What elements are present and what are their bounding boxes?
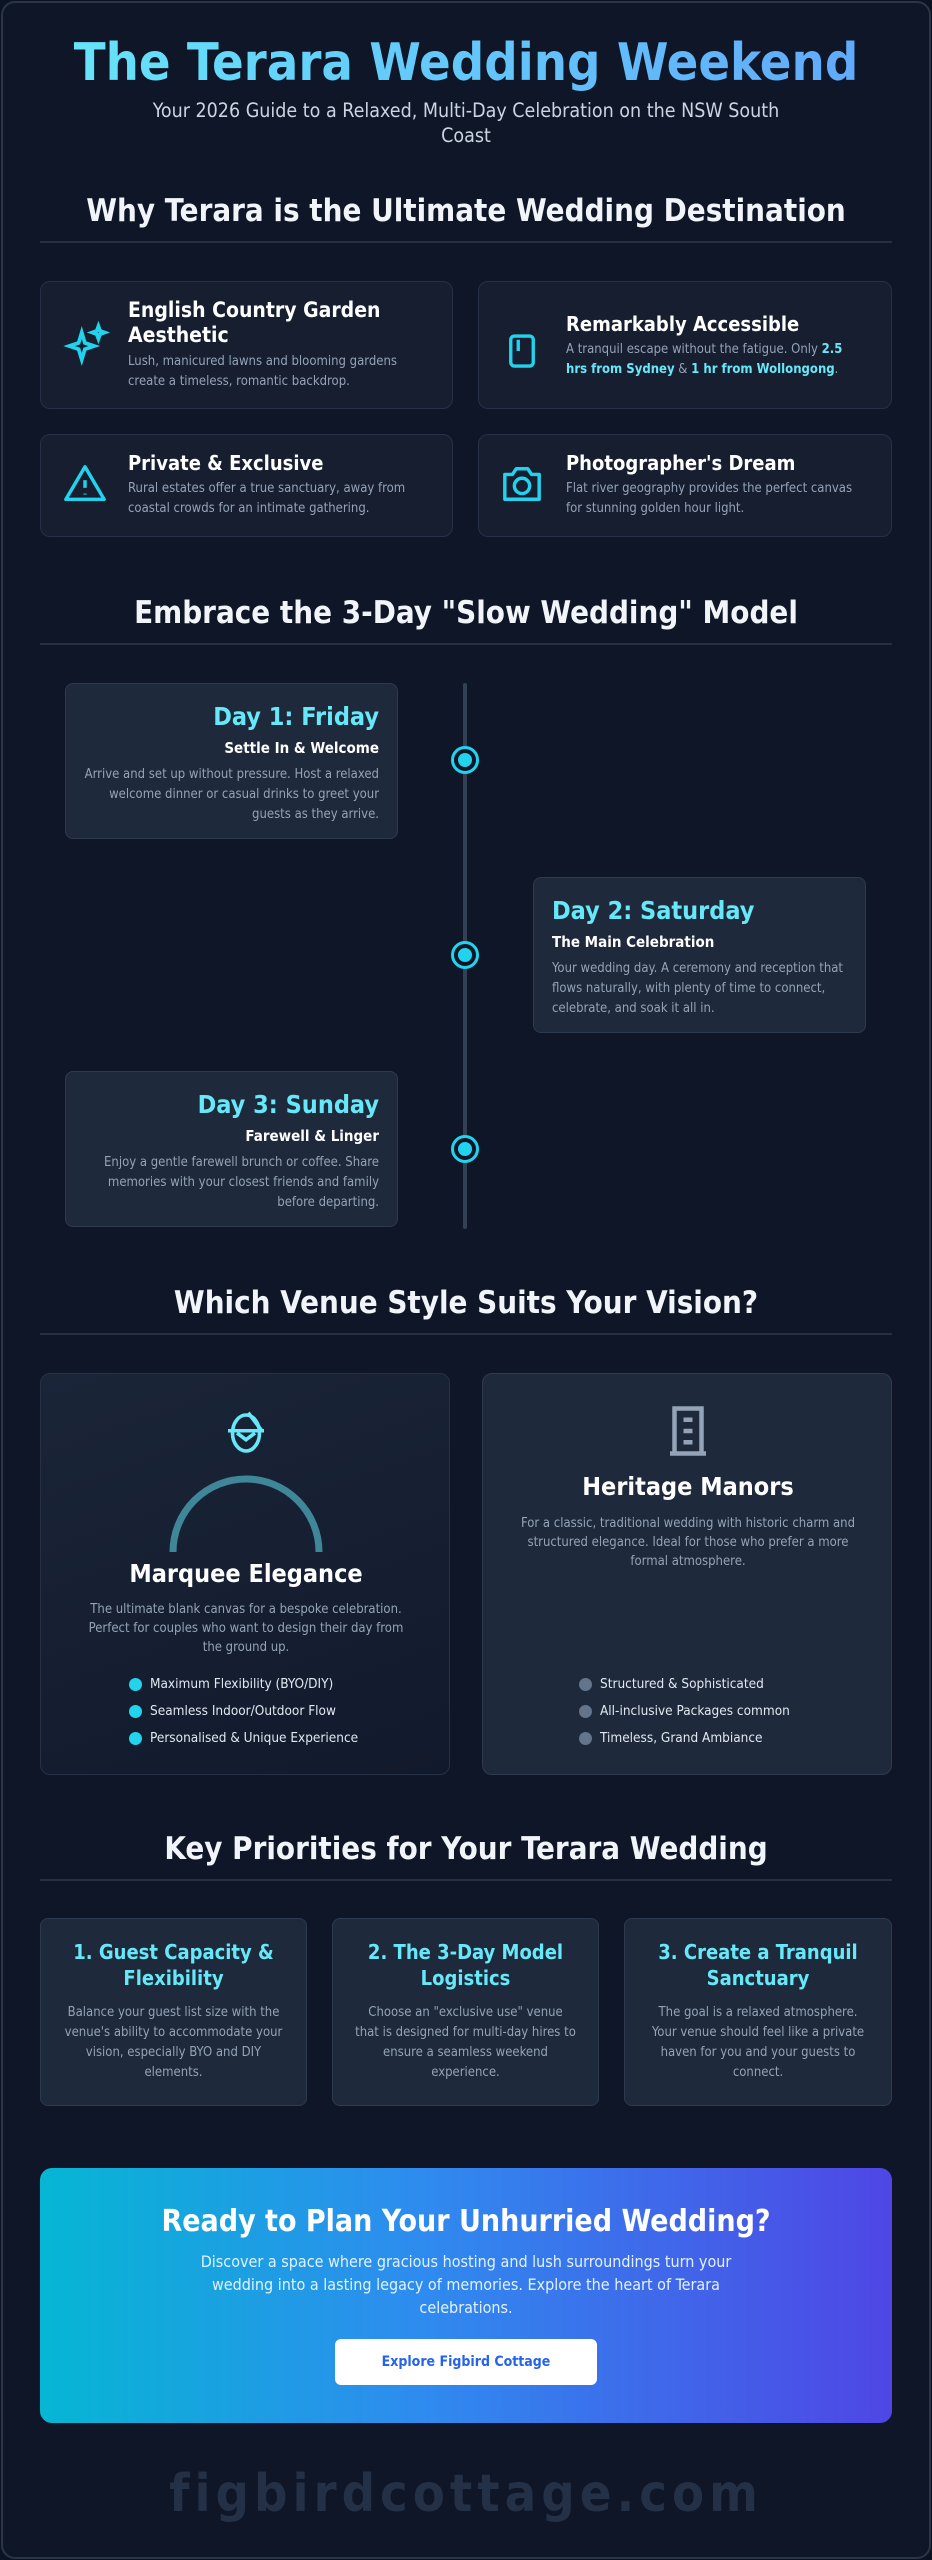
card: private (40, 434, 453, 537)
list (579, 1676, 790, 1746)
list: Timeless, Grand Ambiance (600, 1730, 763, 1746)
card: english garden: English Country Garden (128, 298, 380, 322)
icon: building (670, 1406, 706, 1456)
day 2 card: Your wedding day. A ceremony and reception that flows naturally, with plenty of time to connect, celebrate, and soak it all in. (552, 961, 843, 1016)
list: All-inclusive Packages common (600, 1703, 790, 1719)
priority 2: Choose an "exclusive use" venue that is designed for multi-day hires to ensure a seamless weekend experience. (355, 2005, 576, 2080)
button (335, 2339, 597, 2385)
priority 3 (624, 1918, 892, 2106)
icon: phone (509, 334, 535, 368)
heading: venue: Which Venue Style Suits Your Vision? (174, 1285, 758, 1321)
panel: marquee (40, 1373, 450, 1775)
arch (170, 1476, 322, 1552)
priority 3: 3. Create a Tranquil Sanctuary (658, 1940, 858, 1990)
card: photographer: Photographer's Dream (566, 451, 795, 475)
card: photographer: Flat river geography provides the perfect canvas (566, 481, 852, 496)
priority 1 (40, 1918, 307, 2106)
list (129, 1676, 358, 1746)
card: private: Rural estates offer a true sanctuary, away from (128, 481, 405, 496)
panel: heritage: For a classic, traditional wedding with historic charm and structured elegance. Ideal for those who prefer a more formal atmosphere. (521, 1516, 855, 1569)
day 3 card: Day 3: Sunday (198, 1090, 379, 1119)
heading: why terara: Why Terara is the Ultimate Wedding Destination (86, 193, 846, 229)
list: Seamless Indoor/Outdoor Flow (150, 1703, 336, 1719)
panel: heritage: Heritage Manors (582, 1472, 794, 1501)
priority 2 (332, 1918, 599, 2106)
icon: sparkles (64, 320, 110, 366)
footer: figbirdcottage.com (169, 2464, 763, 2524)
card: photographer: for stunning golden hour light. (566, 501, 744, 516)
day 2 card: Day 2: Saturday (552, 896, 754, 925)
subtitle: Your 2026 Guide to a Relaxed, Multi-Day Celebration on the NSW South Coast (153, 99, 779, 147)
card: accessible: A tranquil escape without the fatigue. Only 2.5 (566, 342, 842, 357)
day 2 card: The Main Celebration (552, 933, 714, 951)
card: accessible: hrs from Sydney & 1 hr from Wollongong. (566, 362, 838, 377)
day 1 card (65, 683, 398, 839)
card: english garden (40, 281, 453, 409)
icon: marquee (228, 1412, 264, 1453)
priority 1: 1. Guest Capacity & Flexibility (73, 1940, 274, 1990)
panel: marquee: The ultimate blank canvas for a bespoke celebration. Perfect for couples who want to design their day from the ground up. (89, 1602, 403, 1655)
priority 1: Balance your guest list size with the venue's ability to accommodate your vision, especially BYO and DIY elements. (65, 2005, 282, 2080)
list: Structured & Sophisticated (600, 1676, 764, 1692)
day 3 card: Enjoy a gentle farewell brunch or coffee. Share memories with your closest friends and family before departing. (104, 1155, 379, 1210)
cta (40, 2168, 892, 2423)
card: english garden: create a timeless, romantic backdrop. (128, 374, 350, 389)
panel: marquee: Marquee Elegance (129, 1559, 363, 1588)
priority 2: 2. The 3-Day Model Logistics (368, 1940, 563, 1990)
cta: Discover a space where gracious hosting and lush surroundings turn your wedding into a lasting legacy of memories. Explore the heart of Terara celebrations. (201, 2252, 731, 2317)
day 3 card: Farewell & Linger (245, 1127, 379, 1145)
card: accessible: Remarkably Accessible (566, 312, 799, 336)
icon: camera (503, 467, 541, 501)
cta: Ready to Plan Your Unhurried Wedding? (161, 2204, 771, 2239)
panel: heritage (482, 1373, 892, 1775)
card: photographer (478, 434, 892, 537)
heading: priorities: Key Priorities for Your Terara Wedding (164, 1831, 768, 1867)
priority 3: The goal is a relaxed atmosphere. Your venue should feel like a private haven for you and your guests to connect. (652, 2005, 864, 2080)
day 2 card (533, 877, 866, 1033)
list: Maximum Flexibility (BYO/DIY) (150, 1676, 333, 1692)
day 1 card: Arrive and set up without pressure. Host a relaxed welcome dinner or casual drinks to greet your guests as they arrive. (85, 767, 379, 822)
timeline (65, 683, 866, 1229)
day 3 card (65, 1071, 398, 1227)
card: private: coastal crowds for an intimate gathering. (128, 501, 370, 516)
title: The Terara Wedding Weekend (74, 33, 858, 93)
card: english garden: Aesthetic (128, 323, 229, 347)
icon: warning (64, 465, 106, 501)
day 1 card: Settle In & Welcome (224, 739, 379, 757)
list: Personalised & Unique Experience (150, 1730, 358, 1746)
card: private: Private & Exclusive (128, 451, 323, 475)
card: english garden: Lush, manicured lawns and blooming gardens (128, 354, 397, 369)
heading: slow wedding: Embrace the 3-Day "Slow Wedding" Model (134, 595, 798, 631)
day 1 card: Day 1: Friday (213, 702, 379, 731)
button: Explore Figbird Cottage (382, 2354, 550, 2370)
card: accessible (478, 281, 892, 409)
